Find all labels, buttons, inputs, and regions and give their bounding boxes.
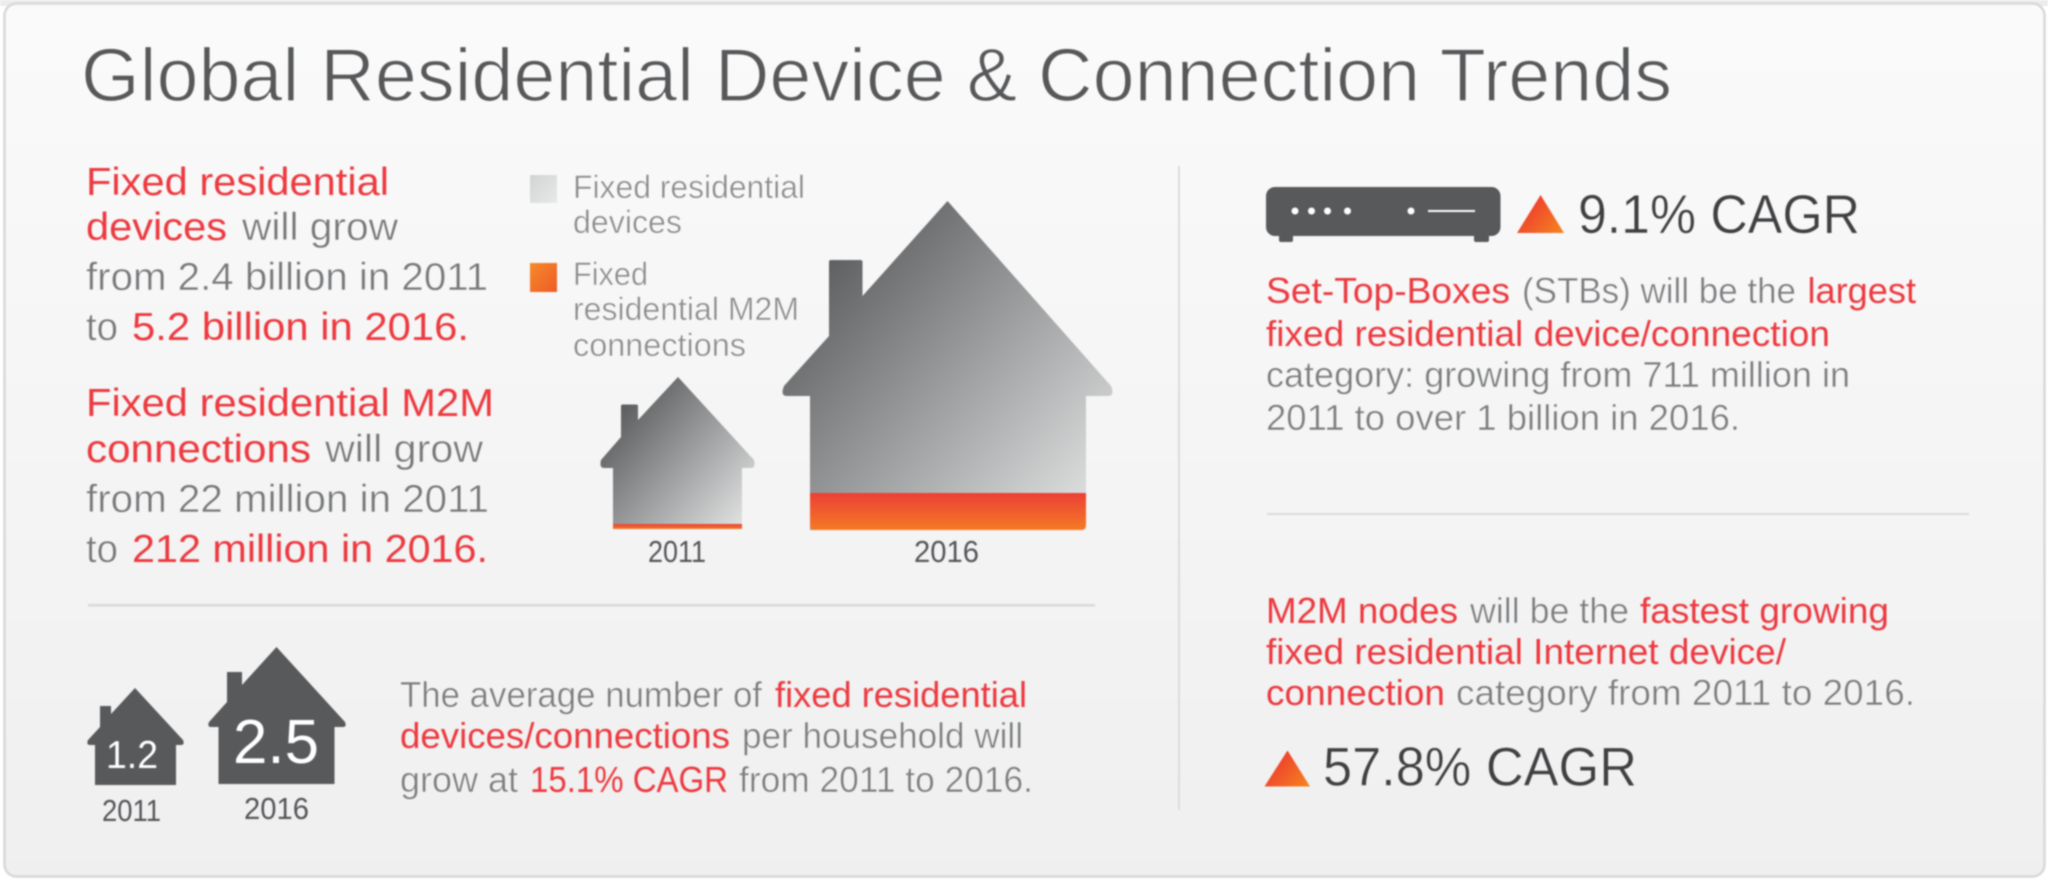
chart: house 2011 (600, 377, 755, 569)
stat: STB CAGR: 9.1% CAGR (1578, 183, 1860, 245)
text block: fixed residential M2M connections: connections (86, 428, 311, 471)
text block: M2M nodes: M2M nodes (1266, 590, 1458, 631)
text block: M2M nodes: connection (1266, 672, 1445, 713)
legend label: M2M: residential M2M (573, 291, 799, 327)
icon: household 2016 with 2.5 (208, 647, 346, 826)
text block: set-top-boxes: fixed residential device/connection (1266, 313, 1830, 354)
divider (88, 604, 1095, 606)
icon: up triangle M2M (1264, 750, 1310, 786)
divider (1267, 513, 1969, 515)
text block: set-top-boxes: category: growing from 711 million in (1266, 354, 1850, 395)
chart: house 2016: 2016 (914, 534, 979, 569)
text block: fixed residential devices: will grow (241, 206, 399, 249)
text block: fixed residential M2M connections (86, 382, 494, 571)
divider (1178, 166, 1180, 810)
icon: set-top box (1266, 187, 1500, 242)
legend swatch: devices (530, 175, 557, 203)
legend label: M2M: Fixed (573, 256, 648, 292)
legend label: devices: devices (573, 204, 682, 240)
text block: set-top-boxes: largest (1808, 270, 1916, 311)
text block: fixed residential M2M connections: to (86, 528, 118, 571)
title: Global Residential Device & Connection Trends (81, 33, 1672, 117)
text block: fixed residential devices: Fixed residential (86, 161, 389, 204)
text block: average per household: The average number of (400, 674, 763, 715)
text block: average per household: devices/connections (400, 715, 730, 756)
text block: M2M nodes: category from 2011 to 2016. (1456, 672, 1915, 713)
icon: household 2011 with 1.2 (87, 688, 184, 828)
text block: M2M nodes: fixed residential Internet device/ (1266, 631, 1786, 672)
text block: fixed residential M2M connections: will grow (324, 428, 484, 471)
text block: fixed residential devices: from 2.4 billion in 2011 (86, 256, 488, 299)
text block: set-top-boxes: (STBs) will be the (1522, 270, 1796, 311)
legend swatch: M2M (530, 263, 557, 292)
text block: M2M nodes (1266, 590, 1915, 713)
icon: household 2011 with 1.2: 1.2 (106, 734, 158, 777)
text block: average per household: grow at (400, 759, 518, 800)
text block: average per household: 15.1% CAGR (530, 759, 728, 800)
legend label: M2M (573, 256, 799, 363)
legend label: devices (573, 169, 805, 240)
text block: fixed residential devices: to (86, 306, 118, 349)
text block: fixed residential devices: devices (86, 206, 227, 249)
text block: fixed residential M2M connections: Fixed residential M2M (86, 382, 494, 425)
text block: fixed residential M2M connections: 212 million in 2016. (132, 528, 488, 571)
text block: average per household: per household will (742, 715, 1023, 756)
legend label: M2M: connections (573, 327, 746, 363)
text block: set-top-boxes: Set-Top-Boxes (1266, 270, 1510, 311)
text block: set-top-boxes: 2011 to over 1 billion in 2016. (1266, 397, 1740, 438)
legend (530, 169, 805, 363)
text block: M2M nodes: will be the (1469, 590, 1629, 631)
text block: average per household: from 2011 to 2016. (739, 759, 1033, 800)
icon: up triangle STB (1517, 195, 1564, 233)
icon: household 2016 with 2.5: 2016 (244, 791, 309, 826)
icon: household 2011 with 1.2: 2011 (102, 793, 161, 828)
text block: fixed residential devices: 5.2 billion in 2016. (132, 306, 469, 349)
text block: M2M nodes: fastest growing (1640, 590, 1889, 631)
legend label: devices: Fixed residential (573, 169, 805, 205)
chart: house 2011: 2011 (648, 534, 706, 569)
text block: set-top-boxes (1266, 270, 1916, 438)
stat: M2M CAGR: 57.8% CAGR (1323, 736, 1637, 798)
text block: average per household (400, 674, 1033, 800)
text block: fixed residential M2M connections: from 22 million in 2011 (86, 478, 489, 521)
chart: house 2016 (783, 201, 1112, 569)
text block: average per household: fixed residential (775, 674, 1027, 715)
text block: fixed residential devices (86, 161, 488, 349)
icon: household 2016 with 2.5: 2.5 (233, 708, 319, 777)
